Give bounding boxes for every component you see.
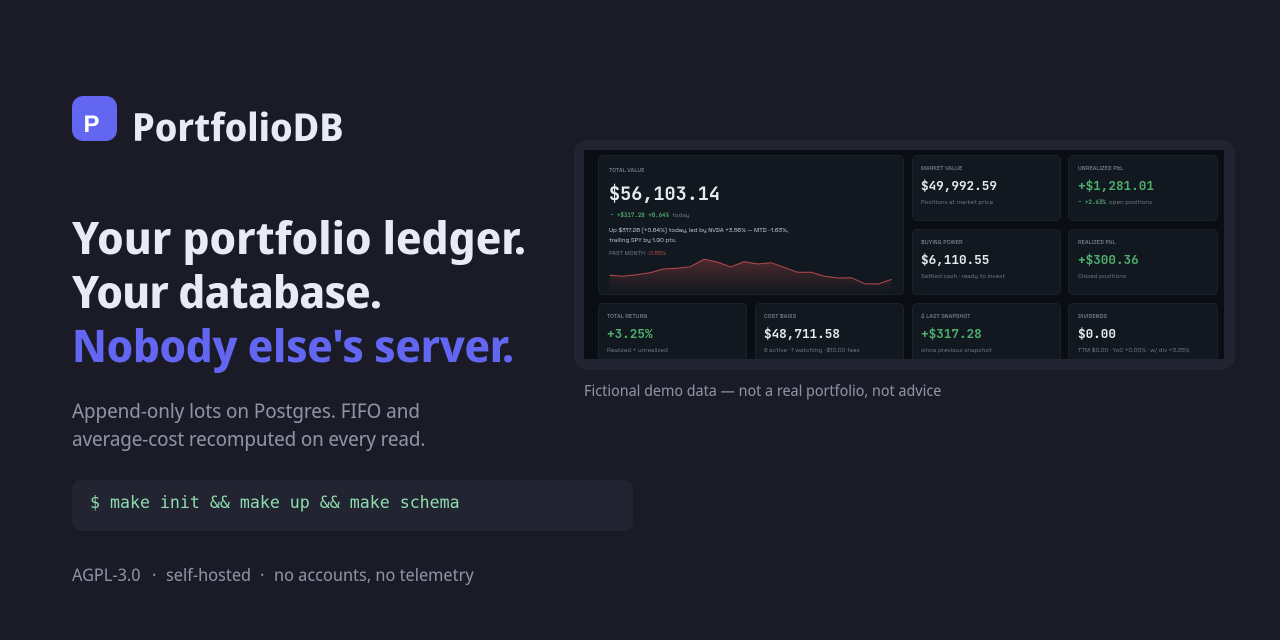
card: last snapshot: since previous snapshot [921, 346, 992, 354]
footer tags: · [152, 564, 157, 587]
card: buying power: BUYING POWER [921, 238, 963, 246]
card: total value: TOTAL VALUE [609, 166, 645, 174]
sparkline chart [610, 258, 892, 288]
card: last snapshot: Δ LAST SNAPSHOT [921, 312, 971, 320]
headline: Your portfolio ledger. [72, 207, 526, 268]
card: unrealized P&L: UNREALIZED P&L [1078, 164, 1124, 172]
card: cost basis: COST BASIS [764, 312, 796, 320]
card: last snapshot [912, 303, 1061, 369]
card: realized P&L: REALIZED P&L [1078, 238, 1116, 246]
footer tags: self-hosted [166, 564, 251, 587]
card: total return: Realized + unrealized [607, 346, 668, 354]
card: dividends: TTM $0.00 · YoC +0.00% · w/ div +3.25% [1078, 346, 1189, 354]
subtitle [72, 397, 425, 452]
card: unrealized P&L: +$1,281.01 [1078, 177, 1154, 194]
headline: Nobody else's server. [72, 315, 514, 376]
card: last snapshot: +$317.28 [921, 325, 982, 342]
card: unrealized P&L: ⌃ +2.63% open positions [1078, 198, 1152, 206]
card: total value: PAST MONTH -0.55% [609, 249, 666, 257]
card: cost basis: 6 active · 1 watching · $10.00 fees [764, 346, 860, 354]
logo icon: P [83, 111, 100, 138]
card: buying power [912, 229, 1061, 295]
card: total value: $56,103.14 [609, 181, 720, 206]
install command: $ make init && make up && make schema [90, 493, 460, 512]
card: market value: $49,992.59 [921, 177, 997, 194]
card: buying power: Settled cash · ready to invest [921, 272, 1005, 280]
card: total value: Up $317.28 (+0.64%) today, led by NVDA +3.56% — MTD -1.63%, [609, 226, 788, 234]
card: buying power: $6,110.55 [921, 251, 989, 268]
card: market value: Positions at market price [921, 198, 993, 206]
card: market value: MARKET VALUE [921, 164, 962, 172]
card: cost basis: $48,711.58 [764, 325, 840, 342]
subtitle: Append-only lots on Postgres. FIFO and [72, 397, 420, 424]
headline: Your database. [72, 261, 381, 322]
card: market value [912, 155, 1061, 221]
dashboard screenshot frame [574, 140, 1235, 370]
card: total value [598, 155, 904, 295]
footer tags: AGPL-3.0 [72, 564, 141, 587]
screenshot caption: Fictional demo data — not a real portfolio, not advice [584, 381, 941, 401]
footer tags: · [260, 564, 265, 587]
card: realized P&L: +$300.36 [1078, 251, 1139, 268]
card: total return [598, 303, 747, 369]
card: unrealized P&L [1068, 155, 1218, 221]
card: realized P&L [1068, 229, 1218, 295]
card: total return: +3.25% [607, 325, 653, 342]
footer tags: no accounts, no telemetry [274, 564, 474, 587]
card: total value: trailing SPY by 1.90 pts. [609, 236, 677, 244]
card: dividends [1068, 303, 1218, 369]
footer tags [72, 564, 474, 587]
brand name: PortfolioDB [132, 101, 344, 153]
card: realized P&L: Closed positions [1078, 272, 1126, 280]
subtitle: average-cost recomputed on every read. [72, 425, 425, 452]
card: dividends: DIVIDENDS [1078, 312, 1107, 320]
headline [72, 207, 526, 376]
card: dividends: $0.00 [1078, 325, 1116, 342]
card: total value: ⌃ +$317.28 +0.64% today [610, 211, 690, 219]
card: cost basis [755, 303, 904, 369]
card: total return: TOTAL RETURN [607, 312, 647, 320]
install command [72, 480, 633, 531]
logo icon [72, 96, 117, 141]
